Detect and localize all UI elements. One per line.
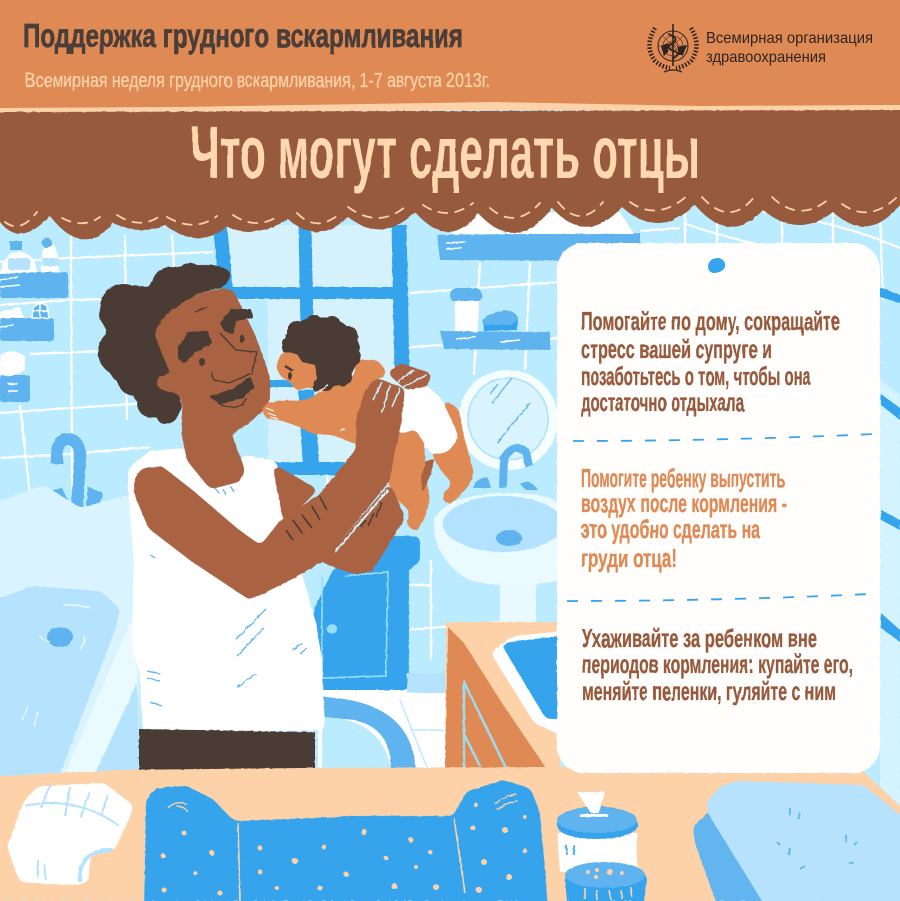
facial features xyxy=(179,307,257,407)
baby hair xyxy=(282,315,361,392)
right shelves xyxy=(437,212,640,350)
mirror xyxy=(458,370,558,470)
sink xyxy=(434,448,563,625)
cabinet xyxy=(314,538,447,703)
WHO logo xyxy=(650,24,873,72)
wipes container xyxy=(557,833,640,872)
hair xyxy=(98,263,232,425)
bathroom background xyxy=(0,200,900,901)
cream stripe xyxy=(0,102,900,114)
WHO name: Всемирная организация xyxy=(706,30,873,47)
right wall strip xyxy=(880,380,900,810)
foreground table xyxy=(0,767,900,901)
father arms and hand xyxy=(136,365,430,598)
tip 2 xyxy=(581,463,787,573)
brown awning xyxy=(0,110,900,239)
header band xyxy=(0,0,900,114)
father xyxy=(98,263,323,771)
shirt xyxy=(130,450,323,731)
trousers xyxy=(139,729,315,771)
baby face xyxy=(278,352,317,390)
changing pad xyxy=(146,782,547,901)
bathtub xyxy=(0,487,140,776)
faucet left xyxy=(50,439,103,510)
right wall stripes xyxy=(880,287,900,642)
icon: WHO emblem xyxy=(650,24,696,72)
orange box xyxy=(445,622,566,770)
icon: hanging hole xyxy=(708,258,725,273)
WHO name: здравоохранения xyxy=(706,49,826,66)
diaper xyxy=(9,785,132,883)
shirt folds xyxy=(147,486,307,706)
right folded towel xyxy=(695,813,785,901)
tip 1: достаточно отдыхала xyxy=(581,387,744,417)
stitches xyxy=(5,195,898,226)
header subtitle: Всемирная неделя грудного вскармливания, 1-7 августа 2013г. xyxy=(25,70,490,92)
tip 1 xyxy=(581,306,840,417)
tip 1: стресс вашей супруге и xyxy=(581,334,772,364)
baby xyxy=(263,315,472,530)
tip 3 xyxy=(582,623,853,706)
tip 2: груди отца! xyxy=(581,543,677,573)
chest skin xyxy=(275,467,315,520)
tip 2: это удобно сделать на xyxy=(581,514,760,544)
floor and toilet xyxy=(318,690,450,775)
divider xyxy=(567,594,870,601)
face and neck xyxy=(156,290,268,487)
header title: Поддержка грудного вскармливания xyxy=(23,17,463,54)
left shelves xyxy=(0,238,68,402)
window xyxy=(220,225,403,475)
panel: tips card xyxy=(557,243,880,773)
divider xyxy=(573,434,875,441)
